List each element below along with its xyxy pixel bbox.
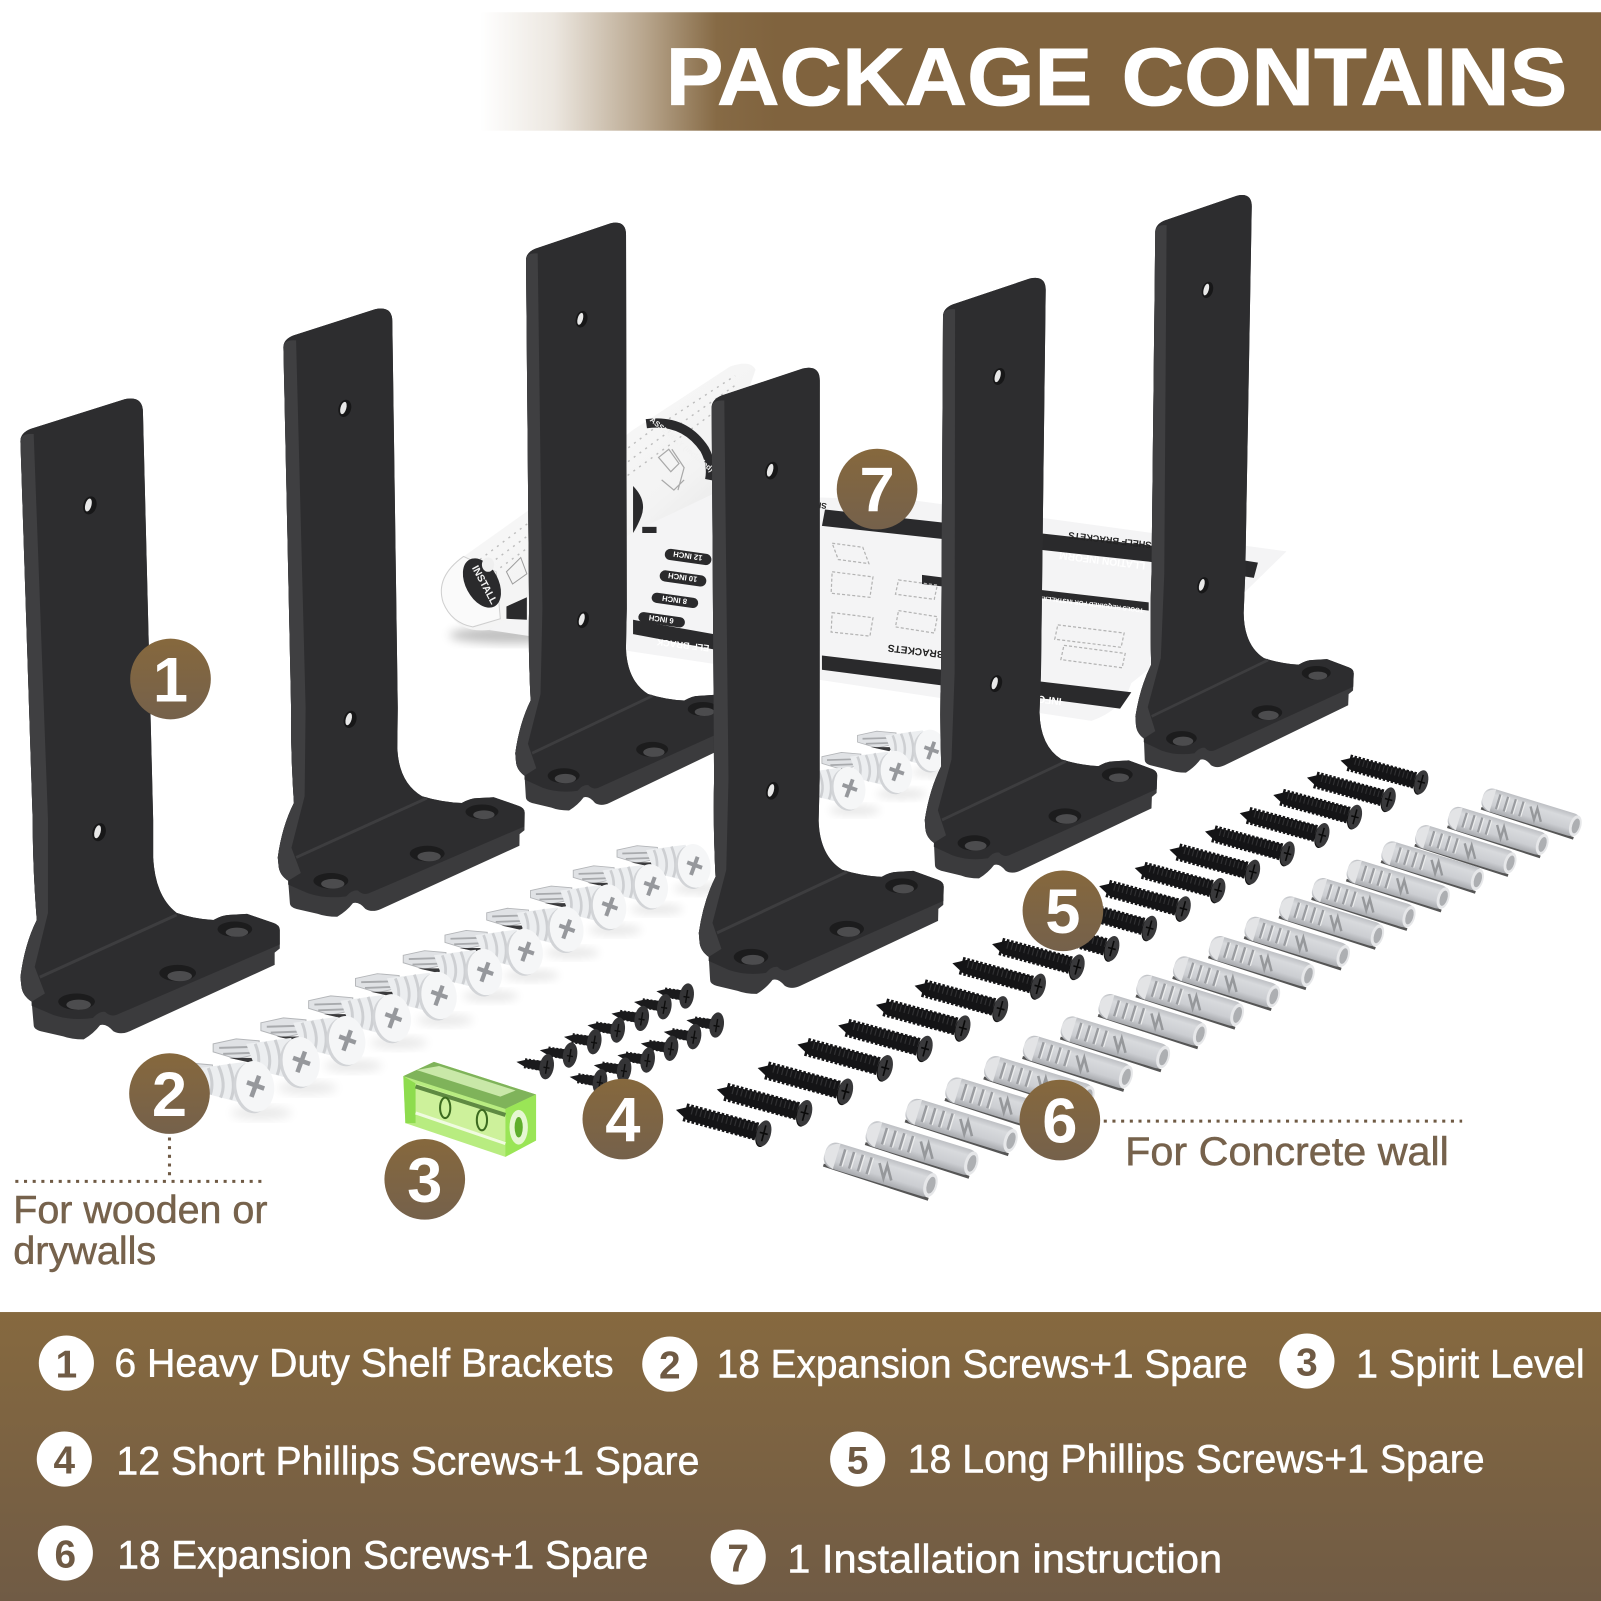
size pill labels: 10 INCH [668,571,698,584]
legend item 7: 7 [727,1537,749,1580]
legend item 5: 5 [847,1439,868,1482]
legend item 6 [38,1525,648,1581]
spirit level [403,1062,536,1157]
instruction sheet: BRACKETS [887,642,945,659]
wooden or drywall leader line [15,1137,265,1181]
bracket 4 [697,368,956,994]
instruction sheet: INFORMATION [990,687,1062,706]
size pill labels [638,548,712,628]
instruction sheet: SHELF BRACKETS [1068,530,1152,550]
legend item 3 [1279,1333,1585,1389]
size pill labels: 8 INCH [662,594,688,606]
marker 7 [837,449,917,529]
marker 4 [583,1079,663,1159]
legend item 6: 18 Expansion Screws+1 Spare [117,1533,648,1577]
marker 2: 2 [152,1060,187,1130]
instruction sheet: SHELF [800,498,827,510]
legend item 7 [711,1530,1222,1585]
legend item 7: 1 Installation instruction [787,1537,1222,1581]
legend item 2: 18 Expansion Screws+1 Spare [717,1342,1248,1386]
marker 1: 1 [153,645,188,715]
legend item 5: 18 Long Phillips Screws+1 Spare [908,1437,1485,1481]
note: for wooden or drywalls: For wooden or [13,1189,268,1232]
legend item 2: 2 [659,1344,681,1387]
size pill labels: 6 INCH [648,613,674,625]
legend item 1: 6 Heavy Duty Shelf Brackets [114,1341,614,1385]
instruction sheet: ASSEMBLY (included) [648,415,716,474]
marker 5: 5 [1045,877,1081,947]
legend item 3: 3 [1296,1341,1318,1384]
instruction sheet [441,364,1287,721]
instruction sheet: INSTALL [469,564,499,606]
marker 6 [1020,1080,1100,1160]
marker 3 [384,1139,465,1220]
legend item 4: 4 [54,1439,76,1482]
marker 7: 7 [859,456,895,526]
expansion screws for wooden or drywalls [165,728,961,1119]
legend item 2 [642,1337,1248,1392]
legend item 4 [37,1432,699,1487]
marker 5 [1023,870,1103,951]
size pill labels: 12 INCH [673,549,703,562]
legend item 5 [830,1432,1485,1487]
bracket 1 [20,398,280,1039]
note: for wooden or drywalls [13,1189,268,1273]
bracket 2 [277,308,530,917]
legend item 1: 1 [56,1343,77,1386]
marker 4: 4 [605,1086,640,1156]
marker 3: 3 [407,1146,442,1216]
legend panel [0,1312,1601,1601]
concrete wall leader line [1104,1120,1462,1123]
bracket 6 [1133,195,1373,773]
marker 6: 6 [1042,1087,1077,1157]
instruction sheet: TOOLS REQUIRED FOR INSTALLATION [1029,593,1144,614]
bracket 3 [514,223,752,810]
legend item 1 [39,1336,614,1391]
marker 1 [130,639,211,719]
header band [480,12,1601,131]
legend item 4: 12 Short Phillips Screws+1 Spare [116,1439,699,1483]
legend item 3: 1 Spirit Level [1356,1342,1585,1386]
short phillips screws [514,979,726,1095]
instruction sheet: LLATION INFORM [1059,549,1146,571]
note: for wooden or drywalls: drywalls [13,1230,156,1273]
note: for concrete wall: For Concrete wall [1125,1130,1449,1174]
title: PACKAGE CONTAINS [666,32,1567,123]
bracket 5 [923,278,1175,878]
concrete wall anchors [821,786,1584,1201]
marker 2 [129,1053,210,1134]
legend item 6: 6 [55,1533,76,1576]
instruction sheet: ELF BRACK [656,637,710,653]
long phillips screws [672,749,1431,1149]
